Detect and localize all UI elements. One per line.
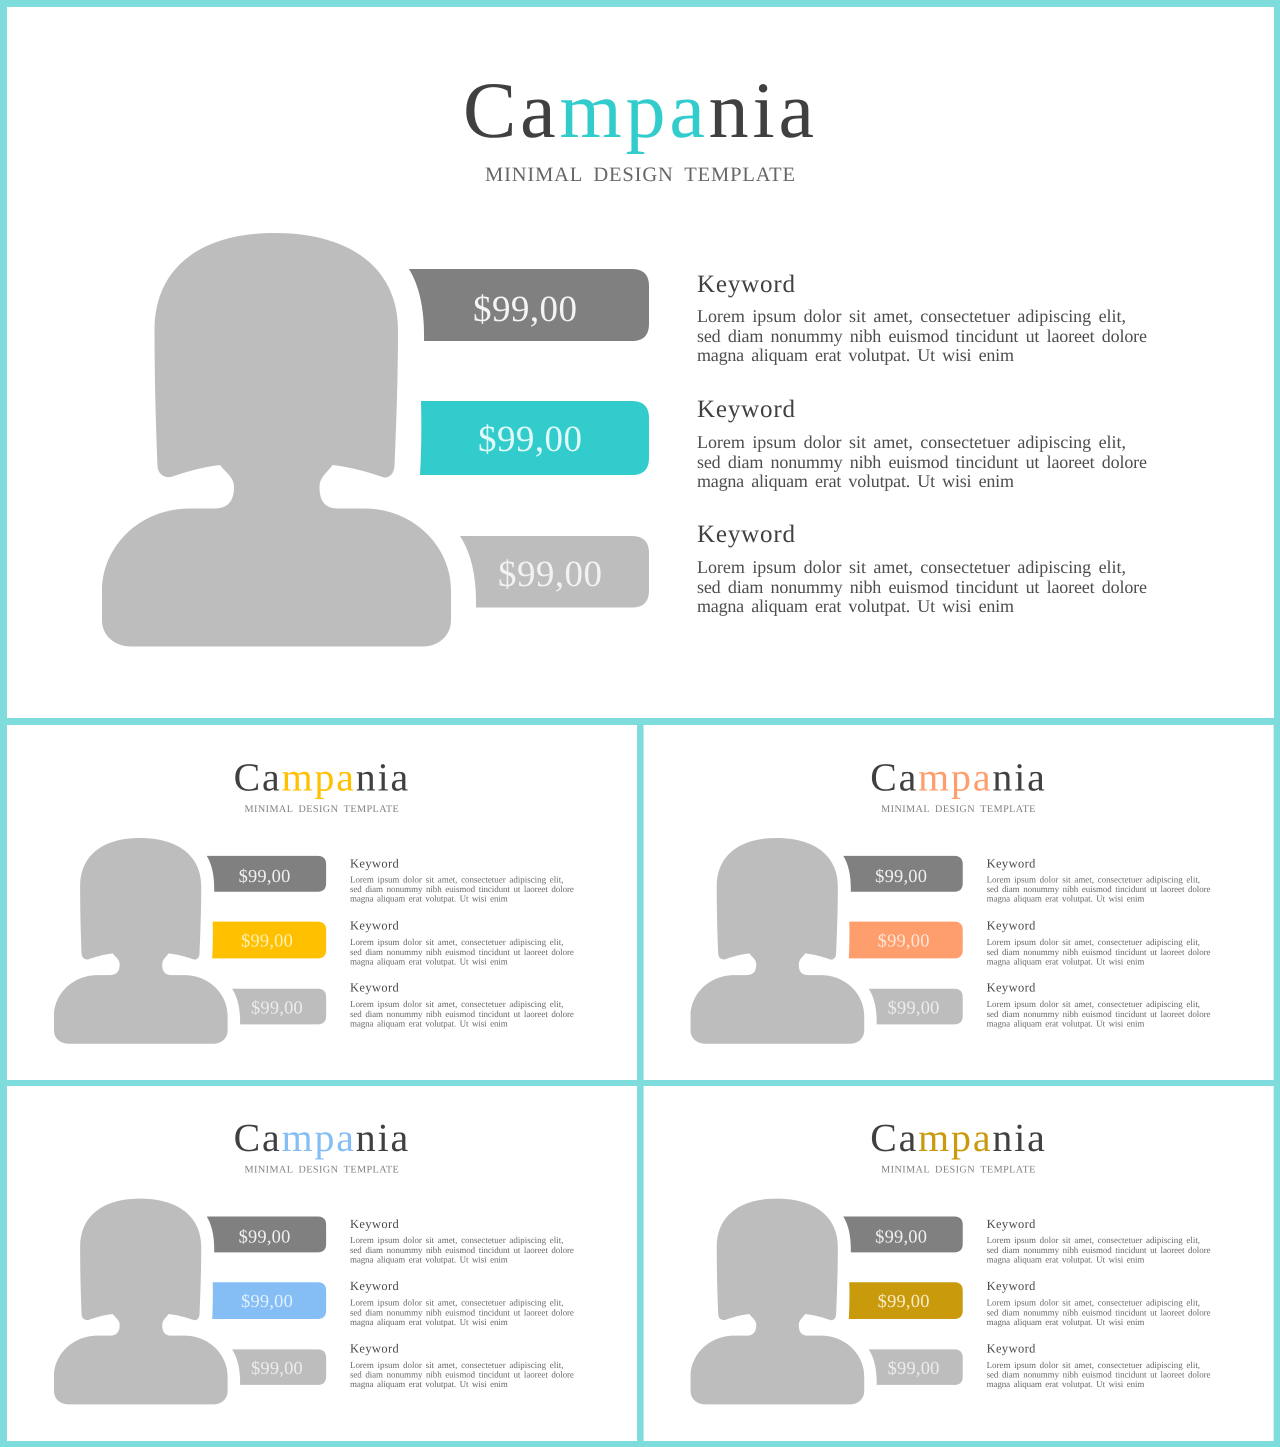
- text block: keyword 2: magna aliquam erat volutpat. Ut wisi enim: [987, 1317, 1144, 1327]
- panel: yellow slide: [7, 725, 637, 1080]
- subtitle: MINIMAL DESIGN TEMPLATE: [245, 1164, 399, 1175]
- text block: keyword 2: Keyword: [350, 919, 399, 933]
- panel: gold slide: [644, 1086, 1274, 1441]
- text block: keyword 2: [350, 1280, 574, 1327]
- subtitle: MINIMAL DESIGN TEMPLATE: [881, 804, 1035, 815]
- text block: keyword 2: Keyword: [350, 1280, 399, 1293]
- text block: keyword 3: sed diam nonummy nibh euismod tincidunt ut laoreet dolore: [987, 1370, 1210, 1380]
- subtitle: MINIMAL DESIGN TEMPLATE: [245, 804, 399, 815]
- text block: keyword 3: sed diam nonummy nibh euismod tincidunt ut laoreet dolore: [697, 577, 1147, 597]
- text block: keyword 1: Lorem ipsum dolor sit amet, consectetuer adipiscing elit,: [350, 874, 563, 884]
- text block: keyword 1: magna aliquam erat volutpat. Ut wisi enim: [697, 345, 1014, 365]
- text block: keyword 3: [350, 1342, 574, 1389]
- title: Campania: [234, 1116, 408, 1160]
- text block: keyword 1: Keyword: [350, 857, 399, 870]
- text block: keyword 2: sed diam nonummy nibh euismod tincidunt ut laoreet dolore: [987, 1308, 1210, 1318]
- bar: dark gray price: [207, 1217, 326, 1252]
- title: Campania: [463, 67, 814, 155]
- text block: keyword 1: magna aliquam erat volutpat. Ut wisi enim: [350, 894, 508, 904]
- text block: keyword 2: sed diam nonummy nibh euismod tincidunt ut laoreet dolore: [987, 947, 1210, 957]
- bar: dark gray price: [207, 856, 326, 892]
- text block: keyword 3: Keyword: [350, 1342, 399, 1355]
- text block: keyword 3: [987, 981, 1210, 1029]
- bar: dark gray price: [843, 856, 963, 892]
- text block: keyword 3: Keyword: [350, 981, 399, 995]
- bar: light gray price: [232, 989, 326, 1024]
- text block: keyword 2: [697, 396, 1147, 491]
- bar: yellow price: $99,00: [241, 931, 293, 951]
- text block: keyword 1: sed diam nonummy nibh euismod tincidunt ut laoreet dolore: [987, 1245, 1210, 1255]
- text block: keyword 2: [350, 919, 574, 966]
- text block: keyword 1: Lorem ipsum dolor sit amet, consectetuer adipiscing elit,: [697, 306, 1126, 326]
- title: Campania: [870, 755, 1045, 799]
- icon: person silhouette: [54, 838, 228, 1044]
- text block: keyword 1: Keyword: [350, 1218, 399, 1231]
- text block: keyword 3: [350, 981, 574, 1029]
- bar: dark gray price: $99,00: [875, 866, 927, 886]
- text block: keyword 3: magna aliquam erat volutpat. Ut wisi enim: [987, 1379, 1144, 1389]
- text block: keyword 1: sed diam nonummy nibh euismod tincidunt ut laoreet dolore: [987, 884, 1210, 894]
- subtitle: MINIMAL DESIGN TEMPLATE: [485, 164, 795, 186]
- subtitle: MINIMAL DESIGN TEMPLATE: [881, 1164, 1035, 1175]
- text block: keyword 2: Keyword: [987, 1280, 1036, 1293]
- bar: light gray price: [232, 1349, 326, 1385]
- text block: keyword 1: sed diam nonummy nibh euismod tincidunt ut laoreet dolore: [697, 326, 1147, 346]
- bar: dark gray price: $99,00: [239, 866, 290, 886]
- text block: keyword 2: magna aliquam erat volutpat. Ut wisi enim: [987, 956, 1144, 966]
- text block: keyword 2: sed diam nonummy nibh euismod tincidunt ut laoreet dolore: [350, 947, 574, 957]
- text block: keyword 2: Keyword: [987, 919, 1036, 933]
- text block: keyword 1: [987, 1218, 1210, 1264]
- text block: keyword 3: [697, 521, 1147, 616]
- text block: keyword 2: Lorem ipsum dolor sit amet, consectetuer adipiscing elit,: [350, 1298, 563, 1308]
- text block: keyword 3: Keyword: [987, 1342, 1036, 1355]
- bar: blue price: $99,00: [241, 1291, 293, 1312]
- bar: dark gray price: $99,00: [239, 1226, 290, 1247]
- bar: light gray price: $99,00: [498, 554, 602, 595]
- text block: keyword 2: [987, 1280, 1210, 1327]
- text block: keyword 2: [987, 919, 1210, 966]
- text block: keyword 1: [350, 857, 574, 904]
- text block: keyword 3: Keyword: [987, 981, 1036, 995]
- text block: keyword 3: sed diam nonummy nibh euismod tincidunt ut laoreet dolore: [987, 1009, 1210, 1019]
- bar: dark gray price: [843, 1217, 963, 1252]
- panel: blue slide: [7, 1086, 637, 1441]
- text block: keyword 1: Lorem ipsum dolor sit amet, consectetuer adipiscing elit,: [987, 874, 1200, 884]
- text block: keyword 1: magna aliquam erat volutpat. Ut wisi enim: [350, 1254, 508, 1264]
- text block: keyword 1: magna aliquam erat volutpat. Ut wisi enim: [987, 1254, 1144, 1264]
- panel: main teal slide: [7, 7, 1274, 718]
- icon: person silhouette: [54, 1199, 228, 1404]
- title: Campania: [870, 1116, 1045, 1160]
- text block: keyword 1: [350, 1218, 574, 1264]
- text block: keyword 2: sed diam nonummy nibh euismod tincidunt ut laoreet dolore: [697, 452, 1147, 472]
- text block: keyword 1: [987, 857, 1210, 904]
- bar: dark gray price: [409, 269, 649, 341]
- bar: orange price: [849, 922, 963, 958]
- bar: light gray price: $99,00: [251, 998, 303, 1018]
- text block: keyword 2: Lorem ipsum dolor sit amet, consectetuer adipiscing elit,: [350, 937, 563, 947]
- bar: light gray price: $99,00: [888, 998, 939, 1018]
- bar: teal price: [420, 401, 649, 475]
- panel: orange slide: [644, 725, 1274, 1080]
- text block: keyword 3: sed diam nonummy nibh euismod tincidunt ut laoreet dolore: [350, 1370, 574, 1380]
- bar: dark gray price: $99,00: [875, 1226, 927, 1247]
- text block: keyword 2: sed diam nonummy nibh euismod tincidunt ut laoreet dolore: [350, 1308, 574, 1318]
- bar: gold price: [849, 1282, 963, 1319]
- bar: blue price: [212, 1282, 326, 1319]
- icon: person silhouette: [102, 233, 451, 646]
- text block: keyword 3: Lorem ipsum dolor sit amet, consectetuer adipiscing elit,: [350, 1360, 563, 1370]
- text block: keyword 2: Lorem ipsum dolor sit amet, consectetuer adipiscing elit,: [987, 1298, 1200, 1308]
- text block: keyword 2: Lorem ipsum dolor sit amet, consectetuer adipiscing elit,: [697, 432, 1126, 452]
- text block: keyword 1: sed diam nonummy nibh euismod tincidunt ut laoreet dolore: [350, 884, 574, 894]
- bar: orange price: $99,00: [878, 931, 929, 951]
- text block: keyword 1: magna aliquam erat volutpat. Ut wisi enim: [987, 894, 1144, 904]
- text block: keyword 1: Keyword: [697, 271, 796, 298]
- bar: light gray price: [869, 989, 963, 1024]
- text block: keyword 2: Keyword: [697, 396, 796, 423]
- text block: keyword 3: magna aliquam erat volutpat. Ut wisi enim: [987, 1019, 1144, 1029]
- icon: person silhouette: [691, 838, 864, 1044]
- bar: light gray price: [869, 1349, 963, 1385]
- text block: keyword 2: magna aliquam erat volutpat. Ut wisi enim: [697, 471, 1014, 491]
- text block: keyword 1: Lorem ipsum dolor sit amet, consectetuer adipiscing elit,: [987, 1235, 1200, 1245]
- bar: yellow price: [212, 922, 326, 958]
- text block: keyword 3: magna aliquam erat volutpat. Ut wisi enim: [350, 1379, 508, 1389]
- text block: keyword 3: magna aliquam erat volutpat. Ut wisi enim: [697, 596, 1014, 616]
- bar: light gray price: [460, 536, 649, 608]
- text block: keyword 2: Lorem ipsum dolor sit amet, consectetuer adipiscing elit,: [987, 937, 1200, 947]
- bar: gold price: $99,00: [878, 1291, 929, 1312]
- text block: keyword 3: [987, 1342, 1210, 1389]
- text block: keyword 2: magna aliquam erat volutpat. Ut wisi enim: [350, 956, 508, 966]
- bar: dark gray price: $99,00: [473, 289, 577, 330]
- text block: keyword 3: Lorem ipsum dolor sit amet, consectetuer adipiscing elit,: [350, 999, 563, 1009]
- bar: teal price: $99,00: [478, 419, 582, 460]
- text block: keyword 1: Lorem ipsum dolor sit amet, consectetuer adipiscing elit,: [350, 1235, 563, 1245]
- text block: keyword 3: Lorem ipsum dolor sit amet, consectetuer adipiscing elit,: [697, 557, 1126, 577]
- text block: keyword 3: Lorem ipsum dolor sit amet, consectetuer adipiscing elit,: [987, 999, 1200, 1009]
- icon: person silhouette: [691, 1199, 864, 1404]
- text block: keyword 3: Lorem ipsum dolor sit amet, consectetuer adipiscing elit,: [987, 1360, 1200, 1370]
- text block: keyword 1: Keyword: [987, 857, 1036, 870]
- bar: light gray price: $99,00: [888, 1358, 939, 1379]
- text block: keyword 3: Keyword: [697, 521, 796, 548]
- text block: keyword 3: sed diam nonummy nibh euismod tincidunt ut laoreet dolore: [350, 1009, 574, 1019]
- text block: keyword 3: magna aliquam erat volutpat. Ut wisi enim: [350, 1019, 508, 1029]
- title: Campania: [234, 755, 408, 799]
- text block: keyword 2: magna aliquam erat volutpat. Ut wisi enim: [350, 1317, 508, 1327]
- text block: keyword 1: [697, 271, 1147, 365]
- text block: keyword 1: sed diam nonummy nibh euismod tincidunt ut laoreet dolore: [350, 1245, 574, 1255]
- text block: keyword 1: Keyword: [987, 1218, 1036, 1231]
- bar: light gray price: $99,00: [251, 1358, 303, 1379]
